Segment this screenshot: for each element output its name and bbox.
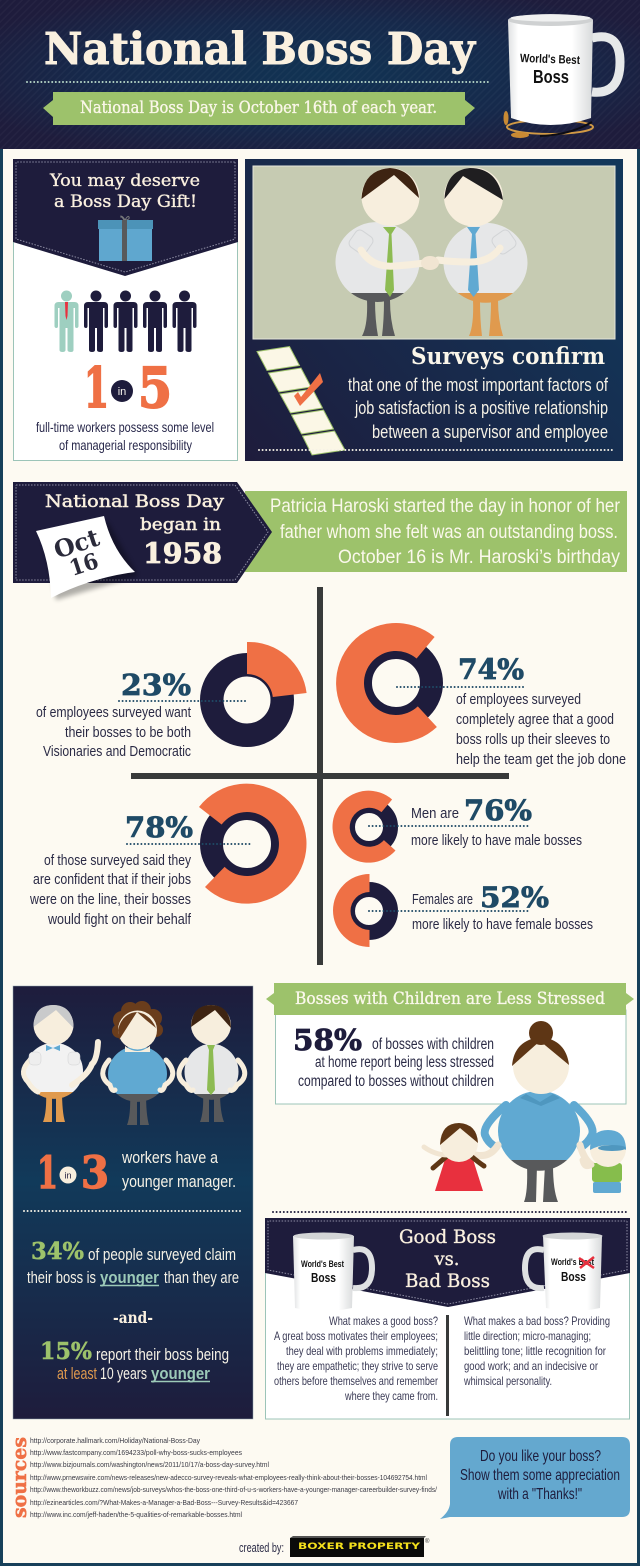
dark arrow banner: 1958 [143,537,222,570]
donut chart [212,642,307,735]
callout: thanks speech bubble [440,1437,630,1519]
stat: females 52 percent donut: Females are [412,891,473,908]
stat: 1 in 5: in [118,386,126,398]
text: bad boss description: whimsical personality. [463,1374,552,1388]
icon: bad boss mug [525,1232,602,1311]
dark arrow banner: began in [140,515,221,535]
stat: 78 percent donut: were on the line, their bosses [29,891,191,908]
text: good boss description: others before themselves and remember [274,1374,438,1388]
green history ribbon [245,491,627,572]
text: bad boss description: belittling tone; little recognition for [464,1344,606,1358]
sources list: http://www.inc.com/jeff-haden/the-5-qualities-of-remarkable-bosses.html [30,1510,242,1519]
stat: females 52 percent donut: more likely to have female bosses [412,916,593,933]
stat: 15 percent: 10 years [100,1364,147,1383]
stat: 23 percent donut: their bosses to be both [65,724,191,741]
stat: 23 percent donut [36,642,307,760]
stat: 23 percent donut: 23% [121,668,191,702]
stat: 58 percent: at home report being less stressed [315,1054,494,1071]
stat: females 52 percent donut [333,874,593,947]
stat: 74 percent donut: boss rolls up their sleeves to [456,731,610,748]
header banner [0,0,640,149]
chart quadrant cross [131,587,509,965]
pennant heading: a Boss Day Gift! [54,192,197,212]
stat: 15 percent: younger [151,1364,210,1383]
date ribbon: National Boss Day is October 16th of each year. [80,98,437,118]
stat: 58 percent [293,1023,494,1090]
text: good boss description [274,1314,438,1403]
sources list: http://www.theworkbuzz.com/news/job-surveys/whos-the-boss-one-third-of-u-s-workers-have-a-younger-manager-careerbuilder-survey-finds/ [30,1485,438,1494]
panel: surveys confirm [245,159,623,461]
stat: 58 percent: of bosses with children [372,1036,494,1053]
stat: 58 percent: compared to bosses without children [298,1073,494,1090]
stat: 34 percent: than they are [164,1268,239,1287]
panel: boss day gift [13,159,238,460]
stat: females 52 percent donut: 52% [480,881,549,914]
pennant heading: Good Boss [399,1226,496,1248]
stat: 74 percent donut [336,623,626,768]
stat: 34 percent: younger [100,1268,159,1287]
ribbon heading: Bosses with Children are Less Stressed [295,989,605,1008]
donut chart [333,791,396,863]
stat: 34 percent [27,1238,239,1287]
sources list: http://www.bizjournals.com/washington/news/2011/10/17/a-boss-day-survey.html [30,1460,269,1469]
sources list: http://corporate.hallmark.com/Holiday/National-Boss-Day [30,1436,200,1445]
stat: 78 percent donut: 78% [125,811,193,844]
stat: 1 in 5: 5 [138,355,172,420]
icon: good boss mug: World's Best [301,1259,344,1269]
text: younger manager: younger manager. [122,1172,236,1191]
stat: 15 percent: report their boss being [96,1345,229,1364]
panel: good boss vs bad boss [265,1218,630,1419]
dark arrow banner [13,482,272,583]
stat: men 76 percent donut: Men are [411,805,459,822]
text: bad boss description: good work; and an indecisive or [464,1359,598,1373]
illustration: handshake [253,166,615,339]
illustration: three bosses [23,1001,245,1125]
green history ribbon: October 16 is Mr. Haroski’s birthday [338,546,620,568]
stat: 1 in 5: 1 [84,355,109,420]
text: younger manager [121,1148,236,1191]
stat: 78 percent donut: are confident that if their jobs [33,871,191,888]
illustration: mother and children [424,1021,626,1202]
sources list: http://www.fastcompany.com/1694233/poll-why-boss-sucks-employees [30,1448,242,1457]
text: job satisfaction [348,375,609,442]
text: younger manager: workers have a [121,1148,218,1167]
stat: 78 percent donut: of those surveyed said they [44,852,191,869]
icon: good boss mug: Boss [311,1270,336,1285]
sources list: http://www.prnewswire.com/news-releases/new-adecco-survey-reveals-what-employees-really-think-about-their-bosses-104692754.html [30,1473,427,1482]
dark arrow banner: National Boss Day [45,492,224,512]
stat: 34 percent: 34% [31,1238,84,1265]
sources heading: sources [7,1437,31,1518]
heading: surveys confirm: Surveys confirm [411,343,605,370]
donut chart [333,874,390,947]
text: good boss description: where they came from. [344,1389,438,1403]
icon: bad boss mug: World's Best [551,1257,594,1267]
footer credit [239,1536,430,1557]
title: National Boss Day [44,24,476,75]
stat: 78 percent donut [29,784,306,928]
stat: 23 percent donut: of employees surveyed want [36,704,192,721]
stat: 15 percent: 15% [40,1338,92,1365]
pennant heading [13,159,238,276]
pennant heading: Bad Boss [405,1270,490,1292]
icon: one in five people [54,290,196,352]
icon: world's best boss mug: World's Best [520,51,580,67]
stat: 58 percent: 58% [293,1023,362,1057]
footer credit: created by: [239,1540,284,1555]
stat: 15 percent: at least [57,1364,97,1383]
stat: 1 in 3: 3 [81,1148,109,1199]
icon: world's best boss mug: Boss [533,67,569,87]
icon: calendar note: 16 [66,548,102,582]
text: bad boss description: little direction; micro-managing; [464,1329,591,1343]
sources list [30,1436,438,1519]
text: managerial responsibility: of managerial responsibility [59,437,192,453]
ribbon heading [266,983,634,1015]
text: good boss description: What makes a good boss? [329,1314,438,1328]
date ribbon [43,92,475,125]
logo: boxer property: ® [425,1538,430,1545]
text: managerial responsibility [36,419,214,453]
stat: 1 in 3: 1 [37,1148,58,1199]
panel: bosses with children [266,983,634,1202]
text: managerial responsibility: full-time workers possess some level [36,419,214,435]
pennant heading: vs. [434,1248,460,1270]
panel: 1958 banner [13,482,627,600]
icon: bad boss mug: Boss [561,1269,586,1284]
stat: 1 in 3: in [64,1170,72,1180]
pennant heading: You may deserve [49,171,200,191]
stat: 74 percent donut: 74% [458,653,524,686]
sources list: http://ezinearticles.com/?What-Makes-a-Manager-a-Bad-Boss---Survey-Results&id=423667 [30,1498,298,1507]
panel: younger manager [13,986,253,1419]
stat: 34 percent: their boss is [27,1268,96,1287]
icon: checklist [256,346,345,455]
callout: thanks speech bubble: Do you like your boss? [480,1448,601,1465]
stat: men 76 percent donut [333,791,582,863]
stat: men 76 percent donut: 76% [464,794,532,827]
icon: calendar note [36,516,138,600]
stat: 23 percent donut: Visionaries and Democratic [43,743,191,760]
stat: 1 in 5 [84,355,172,420]
stat: 74 percent donut: of employees surveyed [456,691,581,708]
stat: 34 percent: of people surveyed claim [88,1245,236,1264]
stat: 78 percent donut: would fight on their behalf [47,911,192,928]
text: and: -and- [113,1308,153,1327]
text: good boss description: they are empathetic; they strive to serve [277,1359,438,1373]
donut chart [199,784,306,904]
icon: gift box [98,216,153,261]
pennant heading [265,1218,630,1307]
text: good boss description: they deal with problems immediately; [286,1344,438,1358]
icon: world's best boss mug [504,14,620,138]
icon: good boss mug [293,1232,372,1311]
text: good boss description: A great boss motivates their employees; [274,1329,438,1343]
logo: boxer property [290,1536,430,1557]
stat: 15 percent [40,1338,229,1383]
callout: thanks speech bubble: with a "Thanks!" [497,1486,582,1503]
donut chart [336,623,437,743]
stat: 1 in 3 [37,1148,109,1199]
icon: calendar note: Oct [50,523,103,564]
logo: boxer property: BOXER PROPERTY [298,1542,421,1552]
stat: men 76 percent donut: more likely to have male bosses [411,832,582,849]
text: bad boss description [463,1314,610,1388]
